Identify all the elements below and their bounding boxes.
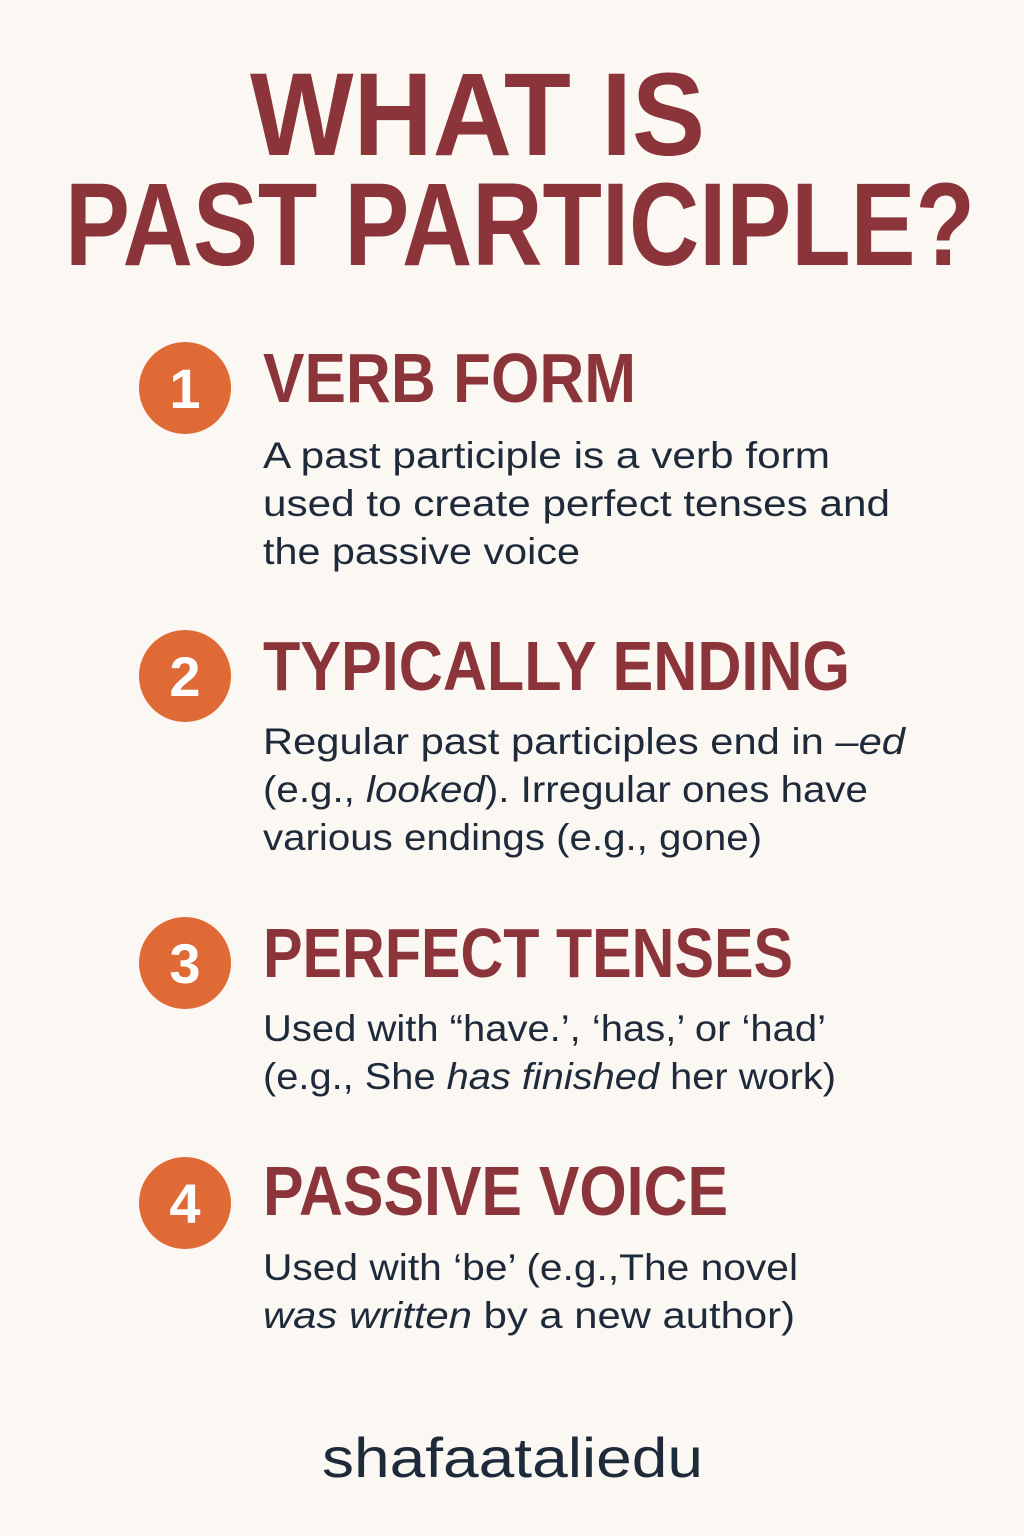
text block: passive voice: Used with ‘be’ (e.g.,The novel (263, 1247, 798, 1288)
heading: verb form: VERB FORM (263, 339, 636, 417)
heading: perfect tenses: PERFECT TENSES (263, 914, 793, 992)
section 3: perfect tenses (139, 914, 836, 1097)
icon: number 2 (139, 630, 231, 722)
title: WHAT IS (250, 49, 705, 181)
text block: verb form (263, 435, 890, 572)
text block: passive voice: was written by a new author) (263, 1295, 795, 1336)
icon: number 3: 3 (169, 932, 201, 995)
text block: perfect tenses (263, 1008, 836, 1097)
icon: number 4 (139, 1157, 231, 1249)
heading: passive voice: PASSIVE VOICE (263, 1152, 728, 1230)
icon: number 1: 1 (169, 357, 201, 420)
footer: brand: shafaataliedu (322, 1426, 703, 1489)
text block: typically ending: (e.g., looked ). Irregular ones have (263, 769, 868, 810)
text block: typically ending (263, 721, 907, 858)
icon: number 1 (139, 342, 231, 434)
icon: number 3 (139, 917, 231, 1009)
title (65, 49, 975, 291)
heading: typically ending: TYPICALLY ENDING (263, 627, 850, 705)
icon: number 4: 4 (169, 1172, 201, 1235)
section 2: typically ending (139, 627, 907, 858)
text block: perfect tenses: (e.g., She has finished her work) (263, 1056, 836, 1097)
text block: verb form: the passive voice (263, 531, 580, 572)
text block: typically ending: various endings (e.g., gone) (263, 817, 762, 858)
text block: typically ending: Regular past participles end in –ed (263, 721, 907, 762)
text block: perfect tenses: Used with “have.’, ‘has,’ or ‘had’ (263, 1008, 826, 1049)
section 4: passive voice (139, 1152, 798, 1336)
section 1: verb form (139, 339, 890, 572)
text block: verb form: A past participle is a verb form (263, 435, 830, 476)
text block: verb form: used to create perfect tenses and (263, 483, 890, 524)
icon: number 2: 2 (169, 645, 201, 708)
text block: passive voice (263, 1247, 798, 1336)
